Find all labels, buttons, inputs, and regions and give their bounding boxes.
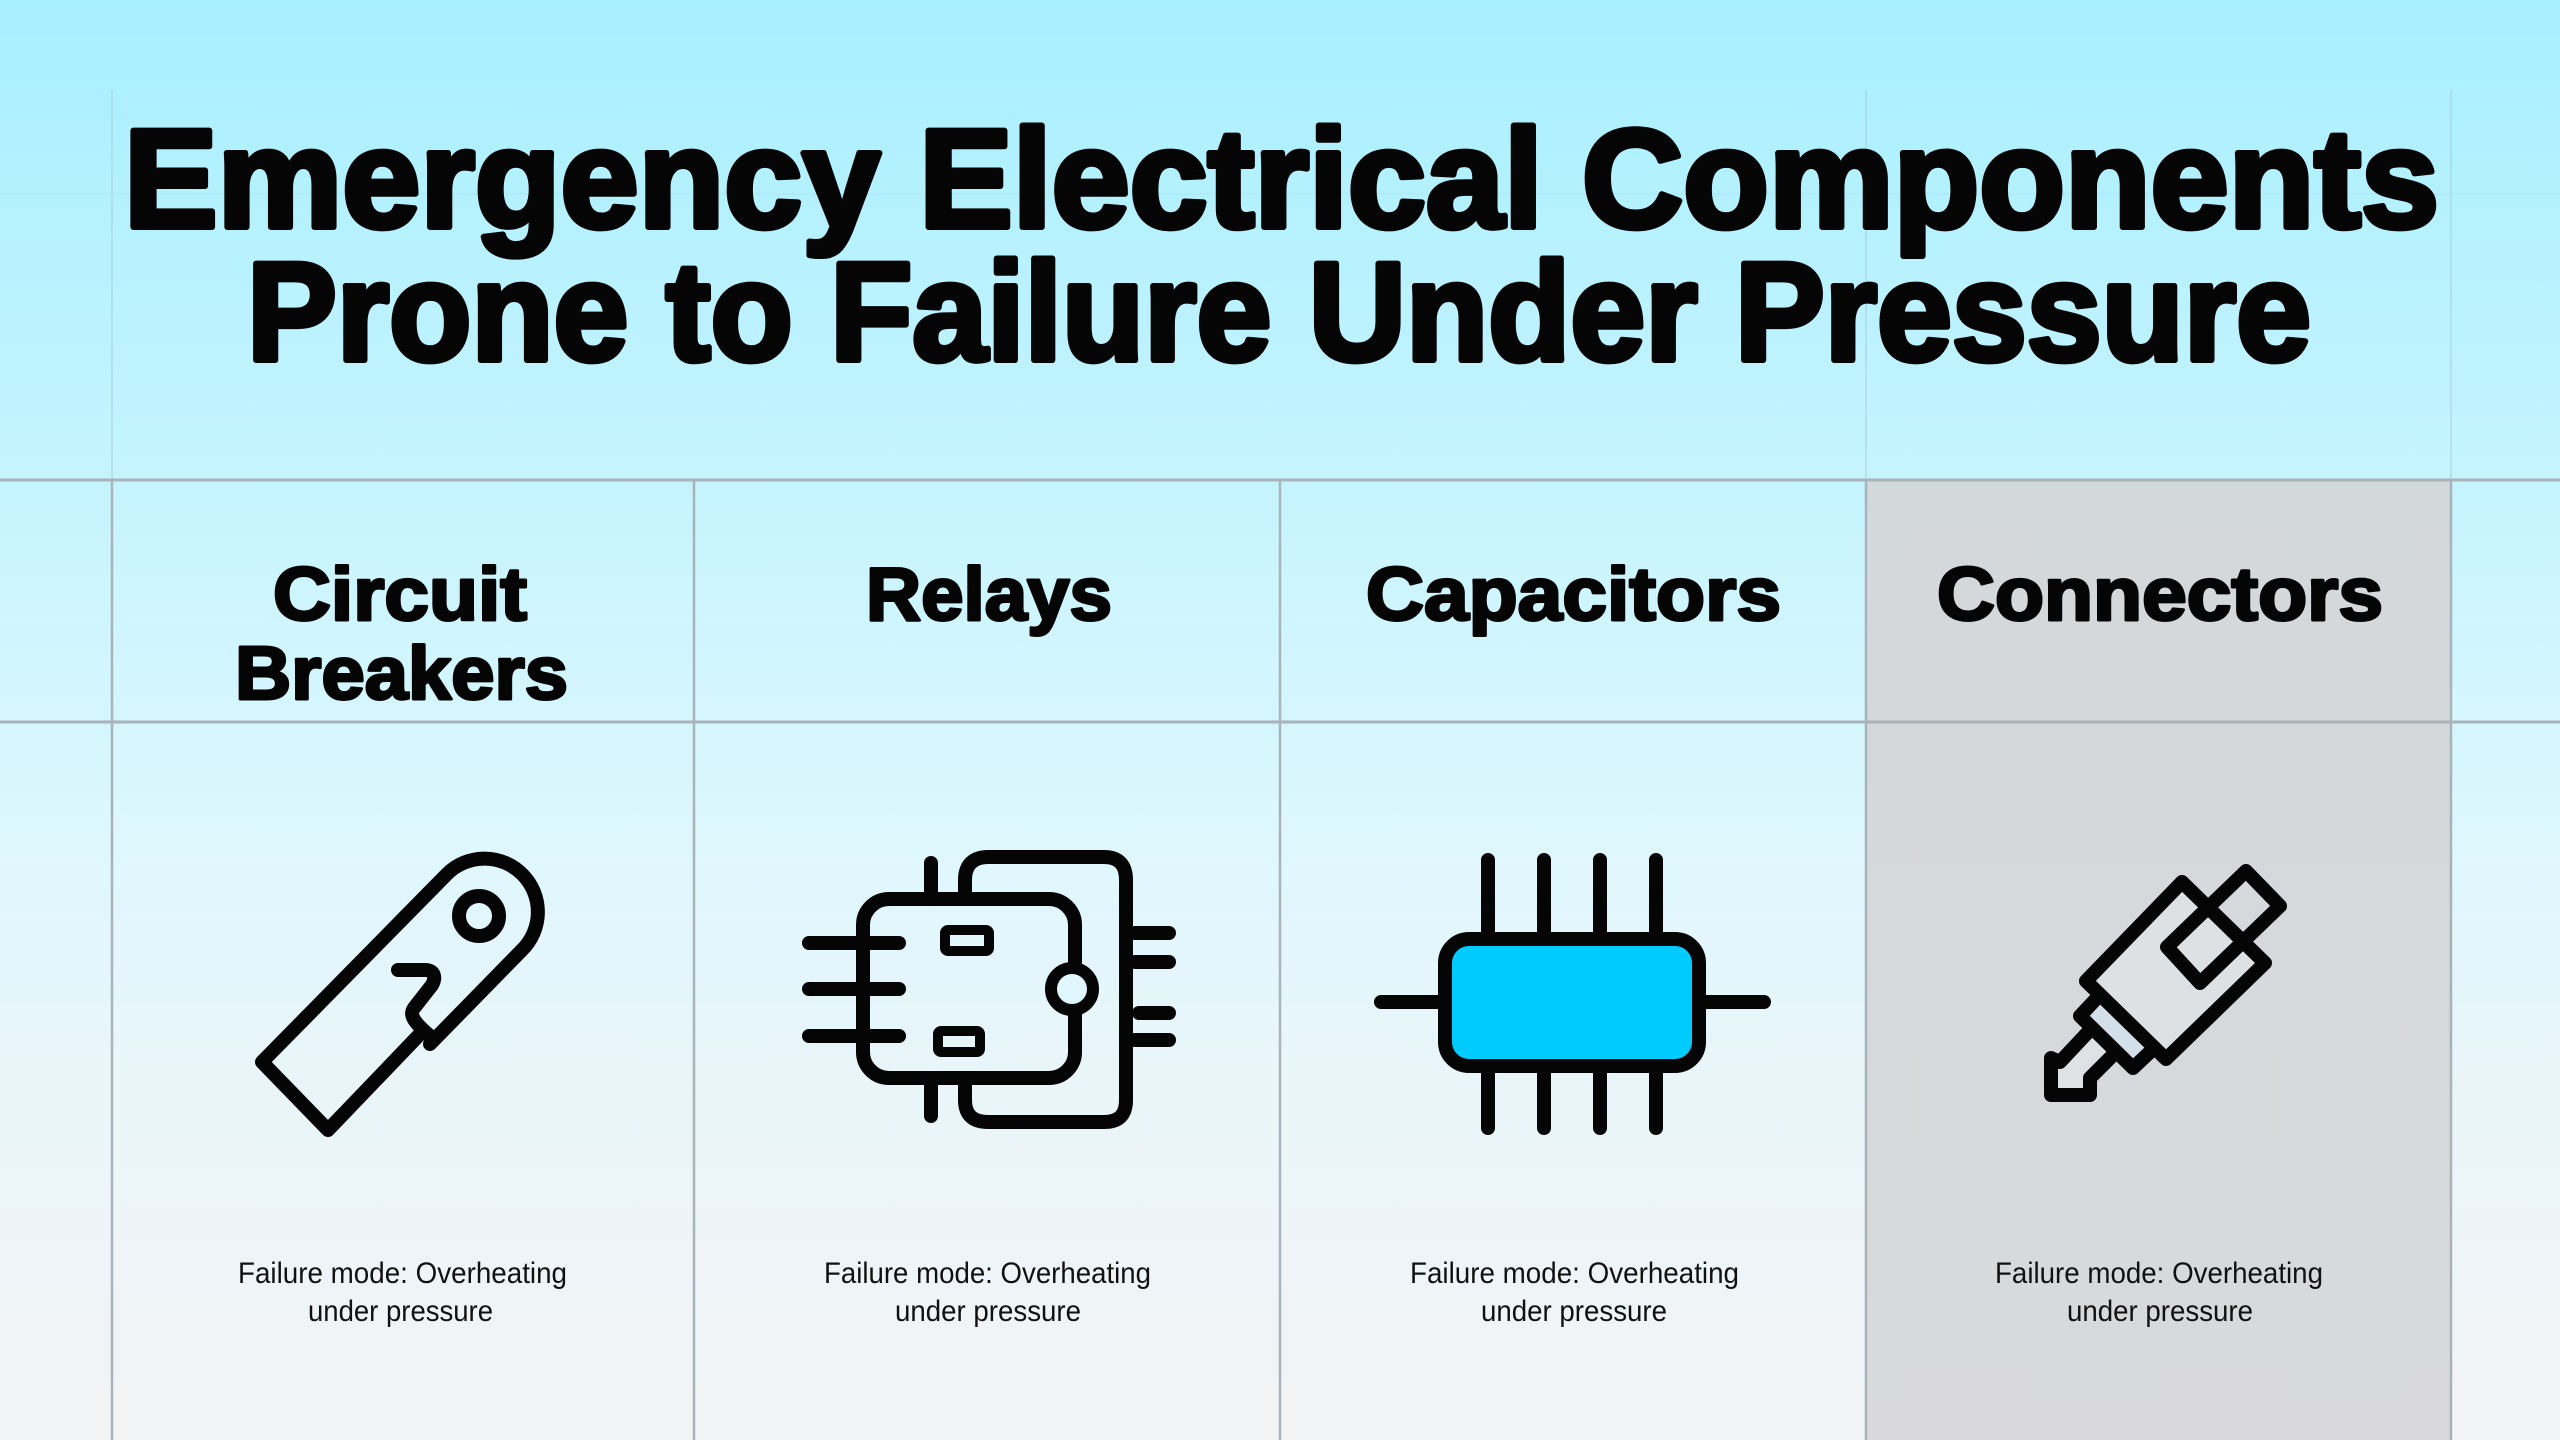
- heading: circuit breakers: [235, 552, 568, 715]
- caption: capacitors: [1410, 1257, 1739, 1328]
- caption: capacitors: Failure mode: Overheating: [1410, 1257, 1739, 1290]
- panel: capacitors: [1366, 552, 1781, 1328]
- heading: circuit breakers: Breakers: [235, 631, 568, 715]
- panel: connectors: [1937, 552, 2383, 1328]
- caption: connectors: under pressure: [2067, 1295, 2253, 1328]
- panel: connectors highlight: [1866, 480, 2451, 1440]
- caption: capacitors: under pressure: [1481, 1295, 1667, 1328]
- icon: relay: [809, 857, 1169, 1122]
- title: Emergency Electrical Components: [124, 100, 2439, 257]
- caption: connectors: [1995, 1257, 2323, 1328]
- caption: relays: [824, 1257, 1151, 1328]
- panel: relays: [809, 552, 1169, 1328]
- caption: connectors: Failure mode: Overheating: [1995, 1257, 2323, 1290]
- heading: capacitors: Capacitors: [1366, 552, 1781, 636]
- title: [124, 100, 2439, 390]
- title: Prone to Failure Under Pressure: [247, 233, 2311, 390]
- caption: circuit breakers: [238, 1257, 567, 1328]
- caption: relays: under pressure: [895, 1295, 1081, 1328]
- icon: circuit breaker: [262, 859, 538, 1130]
- panel: circuit breakers: [235, 552, 568, 1328]
- icon: capacitor: [1381, 860, 1764, 1128]
- heading: connectors: Connectors: [1937, 552, 2383, 636]
- heading: relays: Relays: [866, 552, 1112, 636]
- caption: circuit breakers: under pressure: [308, 1295, 493, 1328]
- icon: connector: [2051, 871, 2280, 1095]
- caption: relays: Failure mode: Overheating: [824, 1257, 1151, 1290]
- heading: circuit breakers: Circuit: [273, 552, 527, 636]
- caption: circuit breakers: Failure mode: Overheating: [238, 1257, 567, 1290]
